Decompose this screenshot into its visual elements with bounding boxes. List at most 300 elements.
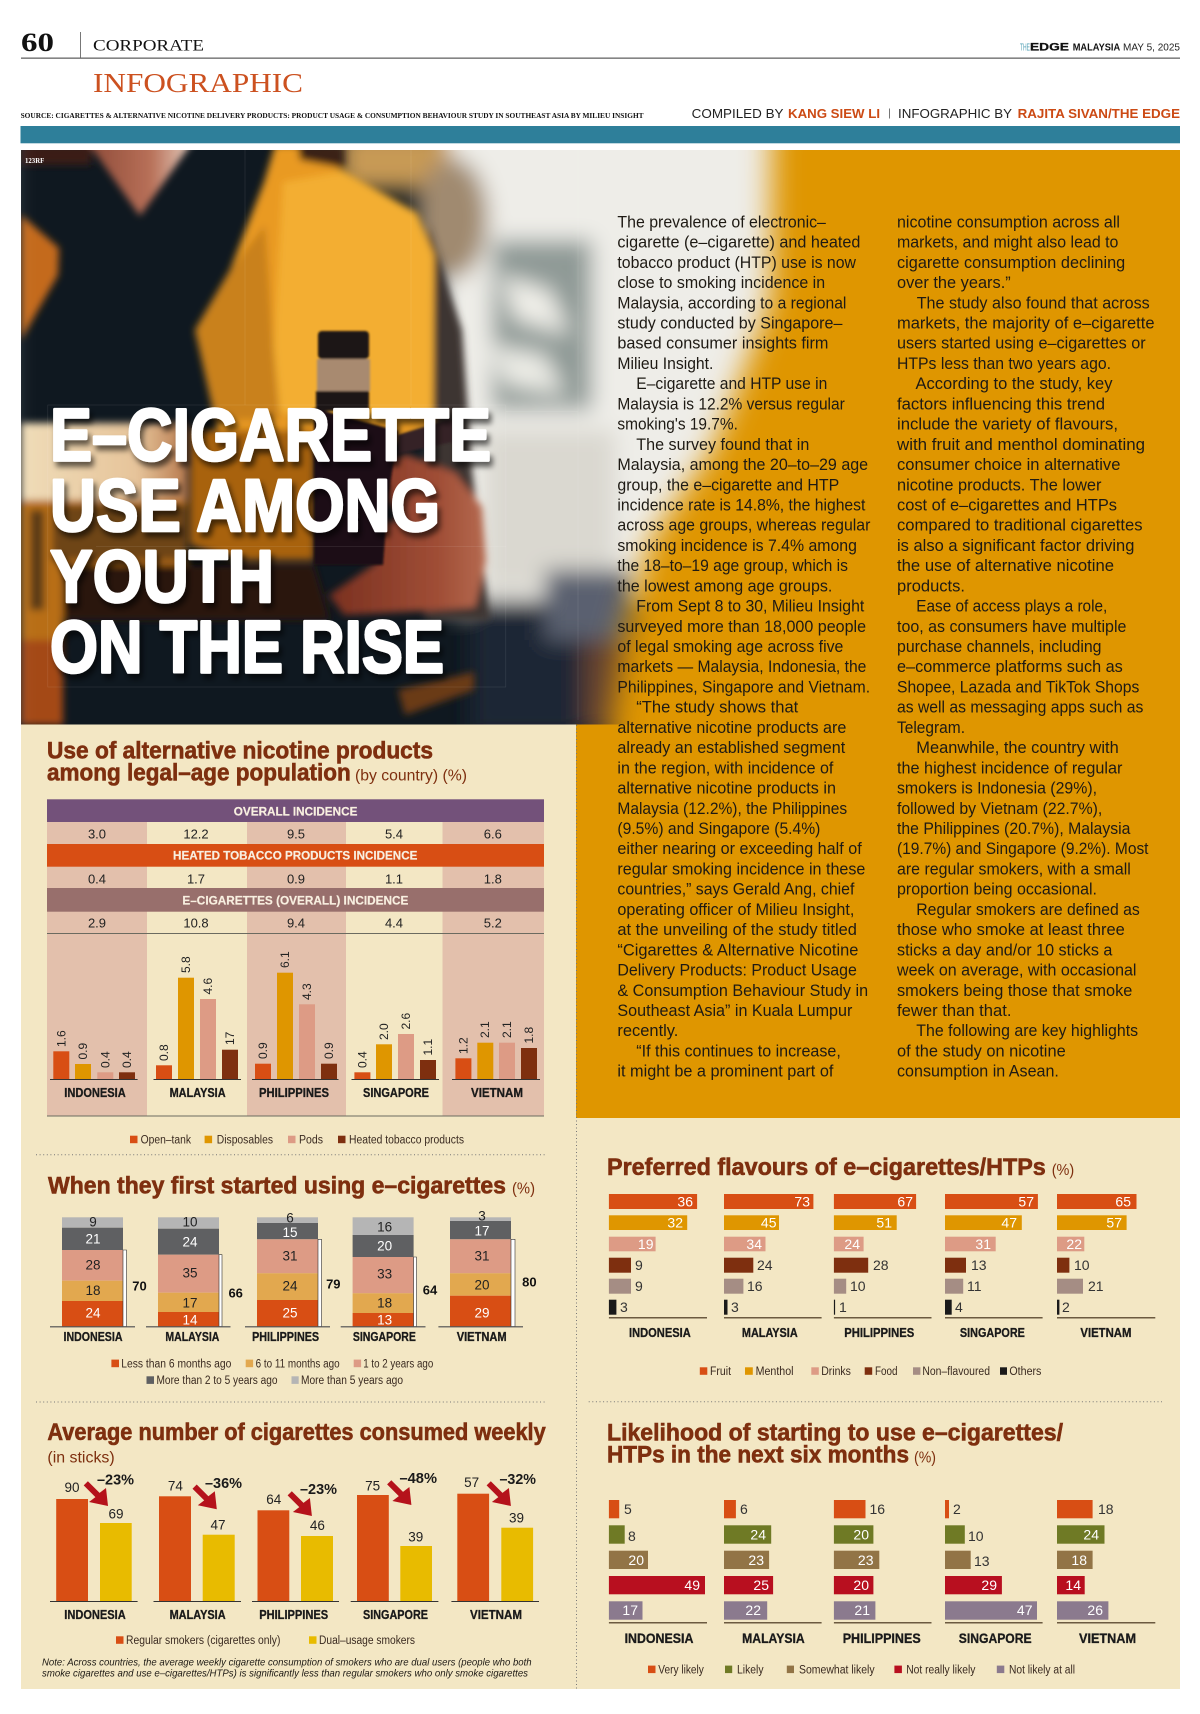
horizontal bars: Singapore: 47 [1001,1214,1017,1230]
horizontal bars: Indonesia [609,1500,705,1620]
horizontal bars: Philippines: 20 [853,1577,869,1593]
horizontal bars: Vietnam: 10 [1074,1257,1090,1273]
masthead and date [1020,42,1180,54]
article text: column 1: group, the e–cigarette and HTP [617,476,839,494]
incidence table and column shading [47,799,544,1116]
stack: Vietnam: 17 [474,1224,490,1239]
bar chart: product types by country: 1.1 [421,1038,435,1056]
article text: column 1: either nearing or exceeding half of [617,840,862,858]
country labels [625,1631,1136,1646]
horizontal bars: Singapore: 29 [981,1577,997,1593]
horizontal bars: Vietnam: 14 [1065,1577,1081,1593]
photo: hand holding a vape device [21,150,796,724]
note: Note: Across countries, the average weekly cigarette consumption of smokers who are dual users (people who both [42,1656,532,1668]
horizontal bars: Malaysia: 16 [747,1278,763,1294]
article text: column 1: of legal smoking age across five [617,638,843,656]
article text: column 1: tobacco product (HTP) use is now [617,254,856,272]
article text: column 2: followed by Vietnam (22.7%), [897,800,1102,818]
article text: column 2: smokers being those that smoke [897,982,1132,1000]
panel: cream background [21,723,1180,1689]
horizontal bars: Indonesia: 36 [677,1194,693,1210]
legend: Food [875,1366,898,1378]
bar chart: product types by country: 0.4 [356,1051,370,1068]
article text: column 2: According to the study, key [916,375,1113,393]
paired bars [50,1471,539,1622]
legend: Less than 6 months ago [121,1358,231,1370]
horizontal bars: Philippines: 67 [897,1194,913,1210]
horizontal bars: Vietnam: 18 [1098,1501,1114,1517]
horizontal bars: Singapore: 11 [967,1278,982,1294]
paired bars: 46 [310,1518,325,1533]
bar chart: product types by country: 0.9 [256,1042,270,1059]
stack: Philippines: 25 [282,1306,298,1321]
chart panel: likelihood of starting [607,1420,1155,1676]
image credit: 123RF [25,158,44,165]
legend: Others [1009,1366,1042,1378]
stacked bars: MALAYSIA [165,1330,219,1344]
stack: Indonesia: 28 [85,1258,101,1273]
paired bars: –36% [205,1476,242,1492]
stacked bars: SINGAPORE [353,1330,416,1344]
article text: column 1: The prevalence of electronic– [617,213,827,231]
article text: column 2: factors influencing this trend [897,395,1105,413]
horizontal bars: Singapore: 47 [1017,1602,1033,1618]
horizontal bars: Philippines: 23 [858,1552,874,1568]
paired bars: 75 [365,1478,380,1493]
horizontal bars: Indonesia: 32 [667,1214,683,1230]
horizontal bars: Philippines: 21 [854,1602,870,1618]
chart panel: average number of cigarettes consumed weekly [42,1419,546,1680]
horizontal bars: Singapore [945,1500,1037,1620]
article text: column 2: products. [897,577,965,595]
left sleeve cream [21,423,187,503]
horizontal bars: Indonesia: 5 [624,1501,632,1517]
incidence table and column shading: 12.2 [183,826,209,841]
stack: Vietnam: 80 [522,1274,537,1289]
article text: column 1: “Cigarettes & Alternative Nicotine [617,941,858,959]
article text: column 1: it might be a prominent part of [617,1063,834,1081]
main title: E–CIGARETTE [50,394,491,477]
legend: Dual–usage smokers [319,1635,415,1647]
horizontal bars: Indonesia: 8 [628,1528,636,1544]
stack: Singapore: 16 [377,1219,392,1234]
article text: column 2: HTPs less than two years ago. [897,355,1111,373]
article text: column 2: smokers is Indonesia (29%), [897,780,1097,798]
legend [700,1366,1042,1378]
page header [20,28,1180,143]
article text: column 2: the use of alternative nicotine [897,557,1114,575]
heading: Use of alternative nicotine products [47,737,433,764]
legend: 6 to 11 months ago [256,1358,340,1370]
stack: Philippines: 15 [282,1225,298,1240]
article text: column 1: E–cigarette and HTP use in [636,375,827,393]
country labels: MALAYSIA [742,1326,798,1340]
legend [116,1635,415,1647]
horizontal bars: Philippines: 24 [844,1236,860,1252]
heading [607,1420,1063,1469]
stack: Singapore: 20 [377,1239,392,1254]
legend: 1 to 2 years ago [363,1358,433,1370]
article text: column 2: the highest incidence of regular [897,759,1123,777]
legend: More than 2 to 5 years ago [156,1375,278,1387]
stack: Malaysia: 14 [182,1313,198,1328]
stack: Indonesia: 9 [89,1214,97,1230]
article text: column 2 [896,213,1154,1081]
incidence table and column shading: 1.7 [187,871,205,886]
incidence table and column shading: 6.6 [484,826,502,841]
stack: Philippines [257,1211,341,1327]
country labels: SINGAPORE [959,1631,1032,1646]
bar chart: product types by country: PHILIPPINES [259,1086,329,1100]
article text: column 1: the lowest among age groups. [617,577,832,595]
bar chart: product types by country: 0.4 [120,1051,134,1068]
horizontal bars: Singapore [945,1194,1038,1315]
heading: among legal–age population [47,760,351,787]
legend: Heated tobacco products [349,1134,464,1146]
paired bars: VIETNAM [470,1608,522,1622]
article text: column 2: e–commerce platforms such as [897,658,1123,676]
bar chart: product types by country: 5.8 [179,956,193,973]
main title: USE AMONG [50,464,440,547]
article text: column 2: the Philippines (20.7%), Malaysia [897,820,1131,838]
article text: column 1: Malaysia is 12.2% versus regular [617,395,845,413]
horizontal bars: Indonesia: 9 [635,1257,643,1273]
horizontal bars: Malaysia: 22 [745,1602,761,1618]
article text: column 1: Milieu Insight. [617,355,713,373]
stack: Indonesia: 70 [132,1278,147,1293]
left lower jacket [21,496,194,646]
incidence table and column shading: OVERALL INCIDENCE [234,805,357,819]
kicker: infographic: INFOGRAPHIC [93,68,303,98]
heading [47,1419,546,1467]
incidence table and column shading: 2.9 [88,915,106,930]
article text: column 2: include the variety of flavours, [897,416,1118,434]
country labels: INDONESIA [629,1326,691,1340]
stack: Malaysia: 66 [228,1285,243,1300]
article text: column 1: cigarette (e–cigarette) and heated [617,234,860,252]
bottom right brown [398,672,474,715]
stack: Vietnam: 3 [478,1209,486,1224]
horizontal bars: Indonesia: 9 [635,1278,643,1294]
article text: column 2: of the study on nicotine [897,1042,1066,1060]
article text: column 2: sticks a day and/or 10 sticks a [897,941,1113,959]
incidence table and column shading: 9.4 [287,915,305,930]
bar chart: product types by country: 0.9 [76,1042,90,1060]
article text: column 2: (19.7%) and Singapore (9.2%). Most [897,840,1149,858]
bar chart: product types by country: 2.0 [377,1023,391,1040]
article text: column 1: (9.5%) and Singapore (5.4%) [617,820,820,838]
hand [329,454,486,615]
incidence table and column shading: HEATED TOBACCO PRODUCTS INCIDENCE [173,849,417,863]
paired bars: 69 [108,1506,124,1521]
legend: Likely [737,1664,764,1676]
incidence table and column shading: 1.8 [484,871,502,886]
stack: Indonesia: 24 [85,1306,101,1321]
paired bars: 47 [210,1517,226,1532]
article text: column 1: markets — Malaysia, Indonesia, the [617,658,866,676]
article text: column 1: alternative nicotine products in [617,780,836,798]
horizontal bars: Vietnam [1057,1500,1114,1620]
stack: Vietnam [450,1209,537,1327]
article text: column 1: smoking's 19.7%. [617,416,738,434]
article text: column 2: The study also found that across [917,294,1150,312]
article text: column 2: compared to traditional cigarettes [897,517,1142,535]
article text: column 2: markets, and might also lead to [897,234,1118,252]
horizontal bars: Singapore: 31 [975,1236,991,1252]
country labels: PHILIPPINES [843,1631,921,1646]
stack: Malaysia: 35 [182,1266,198,1281]
country labels [629,1326,1131,1340]
horizontal bars: Malaysia: 73 [794,1194,810,1210]
masthead and date: THE [1020,42,1030,54]
bar chart: product types by country: MALAYSIA [170,1086,226,1100]
article text: column 2: Ease of access plays a role, [916,598,1107,616]
section name: CORPORATE [93,38,204,55]
stack: Indonesia: 18 [85,1283,101,1298]
bar chart: product types by country: 2.6 [399,1012,413,1030]
smoke background [338,150,796,724]
top-left and neck [21,145,91,165]
legend [648,1664,1075,1676]
article text: column 2: week on average, with occasional [896,961,1136,979]
article text: column 1: “The study shows that [636,699,799,717]
stacked bars [50,1209,537,1344]
stack: Malaysia [158,1215,243,1328]
legend: Drinks [821,1366,851,1378]
jacket yellow [211,150,438,444]
article text: column 2: Telegram. [897,719,965,737]
heading: (%) [914,1450,936,1467]
article text: column 2: too, as consumers have multiple [897,618,1126,636]
incidence table and column shading: E–CIGARETTES (OVERALL) INCIDENCE [182,894,408,908]
horizontal bars: Philippines: 10 [850,1278,866,1294]
stack: Philippines: 24 [282,1279,298,1294]
horizontal bars: Vietnam: 24 [1083,1527,1099,1543]
article text: column 2: markets, the majority of e–cigarette [897,315,1154,333]
stacked bars: PHILIPPINES [252,1330,319,1344]
article text: column 1: Malaysia, according to a regional [617,294,846,312]
stack: Philippines: 6 [286,1211,294,1226]
heading: (by country) (%) [355,768,467,785]
heading: (in sticks) [47,1450,115,1467]
horizontal bars: Indonesia [609,1194,697,1315]
paired bars: MALAYSIA [170,1608,226,1622]
paired bars: INDONESIA [64,1608,126,1622]
horizontal bars: Philippines: 1 [839,1299,847,1315]
legend: Non–flavoured [922,1366,990,1378]
article text: column 1: Malaysia (12.2%), the Philippines [617,800,847,818]
article text: column 1: Philippines, Singapore and Vietnam. [617,678,870,696]
horizontal bars: Indonesia: 49 [684,1577,700,1593]
article text: column 2: with fruit and menthol dominating [896,436,1145,454]
horizontal bars: Singapore: 13 [974,1553,990,1569]
bar chart: product types by country: 0.9 [322,1042,336,1059]
credits: COMPILED BY [692,106,784,121]
heading: When they first started using e–cigarettes [48,1172,506,1199]
chart panel: use of alternative nicotine products [47,737,544,1146]
device [314,331,452,565]
main title [50,394,491,689]
legend: Regular smokers (cigarettes only) [126,1635,281,1647]
main title: ON THE RISE [50,606,444,689]
article text: column 2: over the years.” [897,274,1011,292]
legend: Disposables [217,1134,273,1146]
legend: Open–tank [141,1134,191,1146]
credits: RAJITA SIVAN/THE EDGE [1018,106,1180,121]
horizontal bars: Malaysia: 24 [757,1257,773,1273]
panel: orange article background [576,150,1180,1118]
article text: column 2: consumption in Asean. [897,1063,1059,1081]
article text: column 1: Delivery Products: Product Usage [617,961,857,979]
paired bars: 39 [509,1510,524,1525]
article text: column 1: “If this continues to increase, [636,1042,841,1060]
stack: Malaysia: 17 [182,1296,198,1311]
horizontal bars: Malaysia: 6 [740,1501,748,1517]
note [42,1656,532,1680]
legend: Not likely at all [1009,1664,1075,1676]
article text: column 1: From Sept 8 to 30, Milieu Insight [636,598,865,616]
bar chart: product types by country [50,951,540,1100]
bar chart: product types by country: 2.1 [500,1021,514,1038]
paired bars: 64 [266,1492,282,1507]
chart panel: when they first started using e-cigarettes [48,1172,537,1387]
horizontal bars: Malaysia: 34 [746,1236,762,1252]
article text: column 1: based consumer insights firm [617,335,828,353]
horizontal bars: Vietnam: 26 [1087,1602,1103,1618]
article text: column 2: are regular smokers, with a small [897,860,1131,878]
heading: Preferred flavours of e–cigarettes/HTPs [607,1154,1046,1181]
article text: column 2: as well as messaging apps such as [897,699,1143,717]
bar chart: product types by country: INDONESIA [64,1086,126,1100]
horizontal bars: Indonesia: 19 [638,1236,654,1252]
horizontal bars: Malaysia: 23 [748,1552,764,1568]
legend: Not really likely [906,1664,976,1676]
article text: column 2: nicotine consumption across all [897,213,1120,231]
horizontal bars: Singapore: 2 [953,1501,961,1517]
incidence table and column shading: 5.4 [385,826,403,841]
article text: column 2: those who smoke at least three [897,921,1125,939]
page number: 60 [21,28,54,57]
horizontal bars: Philippines: 20 [853,1527,869,1543]
country labels: VIETNAM [1080,1326,1131,1340]
article text: column 1: close to smoking incidence in [617,274,825,292]
stack: Indonesia: 21 [85,1232,101,1247]
chart panel: preferred flavours [607,1154,1155,1378]
paired bars: –32% [500,1472,536,1488]
legend: Somewhat likely [799,1664,875,1676]
stack: Singapore: 18 [377,1296,392,1311]
bar chart: product types by country: 2.1 [478,1021,492,1038]
article text: column 2: nicotine products. The lower [897,476,1102,494]
legend: Pods [299,1134,323,1146]
legend: Fruit [710,1366,732,1378]
paired bars: 57 [464,1475,479,1490]
horizontal bars: Philippines: 28 [873,1257,889,1273]
paired bars: 90 [64,1480,80,1495]
article text: column 1: surveyed more than 18,000 people [617,618,866,636]
legend: Very likely [658,1664,704,1676]
article text: column 1: alternative nicotine products are [617,719,846,737]
horizontal bars: Vietnam: 57 [1106,1214,1122,1230]
incidence table and column shading: 9.5 [287,826,305,841]
paired bars: –48% [400,1471,437,1487]
article text: column 1: the 18–to–19 age group, which is [617,557,848,575]
article text: column 1: smoking incidence is 7.4% among [617,537,857,555]
source line: SOURCE: CIGARETTES & ALTERNATIVE NICOTINE DELIVERY PRODUCTS: PRODUCT USAGE & CONSUMPTION BEHAVIOUR STUDY IN SOUTHEAST ASIA BY MILIEU INSIGHT [21,111,644,120]
horizontal bars: Philippines [834,1194,916,1315]
heading: (%) [512,1180,535,1197]
article text: column 1 [617,213,871,1081]
bar chart: product types by country: 0.4 [98,1051,112,1068]
article text: column 2: proportion being occasional. [897,881,1097,899]
horizontal bars: Singapore: 57 [1018,1194,1034,1210]
stack: Philippines: 31 [282,1249,298,1264]
jacket right sleeve [425,225,490,620]
masthead and date: EDGE [1030,42,1069,54]
horizontal bars: Malaysia [724,1500,773,1620]
paired bars: SINGAPORE [363,1608,428,1622]
bar chart: product types by country: VIETNAM [471,1086,523,1100]
bar chart: product types by country: 1.6 [54,1030,68,1047]
horizontal bars: Vietnam: 21 [1088,1278,1104,1294]
stack: Malaysia: 24 [182,1235,198,1250]
teal band [20,126,1180,143]
article text: column 2: purchase channels, including [897,638,1102,656]
article text: column 1: in the region, with incidence of [617,759,834,777]
article text: column 1: operating officer of Milieu Insight, [617,901,854,919]
horizontal bars: Malaysia: 25 [753,1577,769,1593]
stack: Singapore: 64 [423,1282,438,1297]
horizontal bars: Malaysia: 45 [761,1214,777,1230]
masthead and date: MALAYSIA [1073,43,1120,54]
horizontal bars: Indonesia: 17 [622,1602,638,1618]
horizontal bars: Malaysia: 24 [750,1527,766,1543]
article text: column 2: Regular smokers are defined as [916,901,1140,919]
horizontal bars: Vietnam [1057,1194,1136,1315]
stack: Singapore: 13 [377,1313,392,1328]
article text: column 2: cost of e–cigarettes and HTPs [897,497,1117,514]
article text: column 1: & Consumption Behaviour Study in [617,982,868,1000]
article text: column 1: across age groups, whereas regular [617,517,871,535]
article text: column 1: study conducted by Singapore– [617,315,843,333]
horizontal bars: Indonesia: 20 [628,1552,644,1568]
horizontal bars: Philippines: 51 [876,1214,892,1230]
article text: column 2: Meanwhile, the country with [916,739,1119,757]
stack: Vietnam: 20 [474,1278,490,1293]
bar chart: product types by country: SINGAPORE [363,1086,429,1100]
paired bars: –23% [97,1472,134,1488]
article text: column 1: already an established segment [617,739,846,757]
heading: (%) [1052,1162,1074,1179]
horizontal bars: Vietnam: 65 [1115,1194,1131,1210]
country labels: PHILIPPINES [844,1326,914,1340]
incidence table and column shading: 0.9 [287,871,305,886]
article text: column 1: incidence rate is 14.8%, the highest [617,497,866,514]
bar chart: product types by country: 1.2 [456,1037,470,1054]
article text: column 2: The following are key highlights [916,1022,1138,1040]
article text: column 2: cigarette consumption declining [897,254,1125,272]
heading: Likelihood of starting to use e–cigarettes/ [607,1420,1063,1447]
stacked bars: INDONESIA [64,1330,122,1344]
heading: Average number of cigarettes consumed weekly [47,1419,546,1446]
article text: column 1: at the unveiling of the study titled [617,921,857,939]
stacked bars: VIETNAM [457,1330,507,1344]
article text: column 1: Southeast Asia” in Kuala Lumpur [617,1002,853,1020]
stack: Vietnam: 31 [474,1249,490,1264]
bar chart: product types by country: 4.6 [201,977,215,994]
horizontal bars: Malaysia: 3 [731,1299,739,1315]
credits: INFOGRAPHIC BY [898,106,1012,121]
